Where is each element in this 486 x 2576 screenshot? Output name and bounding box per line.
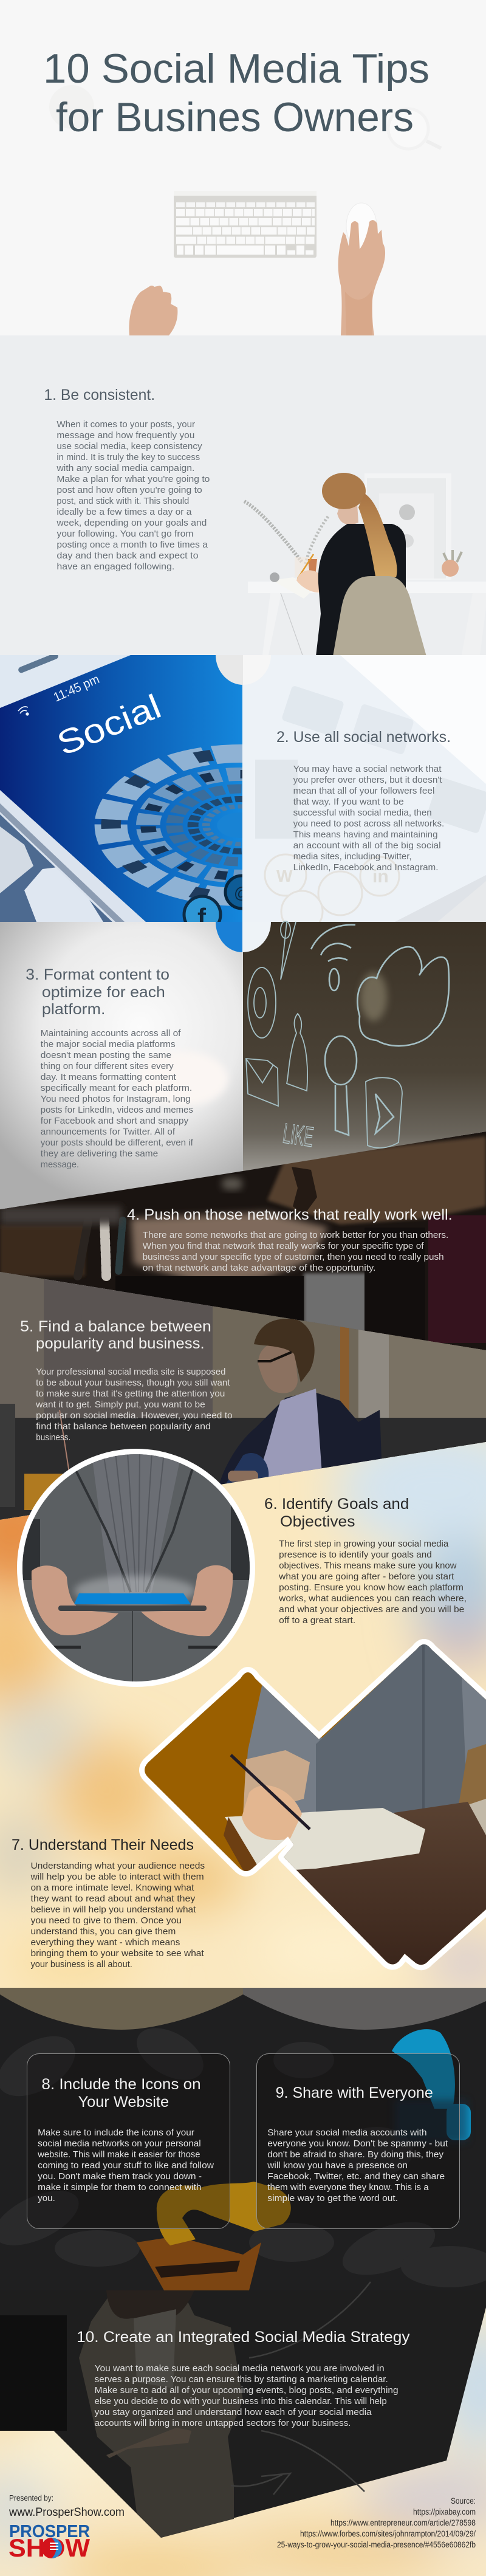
heading (264, 1496, 409, 1530)
footer: presented by: www.ProsperShow.com (9, 2506, 125, 2519)
text block (35, 1367, 233, 1443)
text block: make it simple for them to connect with (38, 2182, 202, 2193)
logo (9, 2522, 90, 2562)
heading: 7. Understand Their Needs (12, 1836, 194, 1853)
text block: specifically meant for each platform. (41, 1083, 192, 1093)
text block: bringing them to your website to see what (30, 1948, 205, 1959)
icon: wifi (311, 925, 355, 991)
panel: tip 7 text (12, 1836, 205, 1970)
text block: you need to post across all networks. (293, 819, 444, 829)
icon: speech cloud (357, 947, 449, 1046)
text block: business and your specific type of customer, then you need to really push (143, 1252, 444, 1262)
icon: pen (231, 1755, 310, 1829)
text block: accounts will bring in more untapped sectors for your business. (95, 2418, 351, 2428)
icon: faint social buttons: W (276, 867, 293, 885)
text block: Maintaining accounts across all of (41, 1028, 181, 1039)
text block: have an engaged following. (56, 562, 174, 572)
text block: day. It means formatting content (41, 1072, 177, 1082)
text block: they are delivering the same (41, 1149, 158, 1159)
text block: Make a plan for what you're going to (56, 474, 210, 484)
heading: 2. Use all social networks. (276, 729, 451, 746)
text block: to make sure that it's getting the attention you (36, 1389, 225, 1399)
text block: presence is to identify your goals and (279, 1550, 432, 1560)
icon: mouse (346, 203, 377, 249)
photo: sketched social icons (243, 921, 486, 1171)
heading: 3. Format content to (26, 966, 169, 983)
text block: use social media, keep consistency (56, 441, 202, 452)
text block: posting. Ensure you know how each platform (279, 1582, 464, 1593)
title: 10 Social Media Tips (43, 46, 430, 92)
panel: tip 8 (27, 2054, 230, 2229)
label: Like: LIKE (281, 1117, 315, 1153)
text block: you. Don't make them track you down - (38, 2171, 202, 2182)
heading (26, 966, 169, 1018)
photo: phone showing Social (0, 655, 242, 922)
icon: facebook button (182, 895, 222, 922)
text block: understand this, you can give them (30, 1926, 176, 1937)
text block: posting once a month to five times a (56, 540, 208, 550)
clasped hands (131, 1212, 328, 1285)
text block: LinkedIn, Facebook and Instagram. (293, 862, 439, 873)
heading: 10. Create an Integrated Social Media Strategy (77, 2329, 410, 2346)
dark photo base behind tip 4 (0, 1124, 486, 1355)
heading (20, 1318, 211, 1352)
icon: bell (287, 1014, 307, 1091)
text block: to be about your business, though you still want (36, 1378, 230, 1388)
heading (41, 2076, 201, 2111)
panel: watercolor background for tips 6 and 7 (0, 1422, 486, 1993)
forearm (267, 1136, 486, 1224)
text block: find that balance between popularity and (36, 1421, 211, 1432)
text block: what you are going after - before you start (278, 1571, 454, 1582)
icon: pin (281, 921, 296, 980)
text block: doesn't mean posting the same (41, 1050, 171, 1060)
heading: popularity and business. (36, 1335, 205, 1352)
text block: popular on social media. However, you need to (36, 1410, 233, 1421)
icon: at button: @ (234, 884, 250, 902)
decorative arrows (231, 2282, 371, 2495)
panel: tip 10 (0, 2282, 486, 2538)
text block: them with everyone they know. This is a (267, 2182, 429, 2193)
icon: magnifier (325, 1036, 357, 1135)
text block: you prefer over others, but it doesn't (293, 775, 442, 785)
panel: tip 9 (256, 2054, 459, 2229)
heading: 4. Push on those networks that really work well. (127, 1206, 453, 1223)
footer: sources (277, 2496, 476, 2549)
text block: This means having and maintaining (293, 829, 437, 840)
text block: You may have a social network that (293, 764, 442, 774)
text block: post and how often you're going to (56, 485, 202, 495)
text block: off to a great start. (279, 1615, 355, 1626)
text block: will know you have a presence on (267, 2160, 408, 2171)
icon: right hand (338, 220, 385, 335)
text block: you. (38, 2193, 55, 2203)
text block: mean that all of your followers feel (293, 786, 434, 796)
heading: 8. Include the Icons on (41, 2076, 201, 2093)
text block: You need photos for Instagram, long (41, 1094, 191, 1104)
text block (267, 2128, 448, 2203)
text block (143, 1230, 448, 1273)
text block: objectives. This means make sure you know (279, 1561, 457, 1571)
heading: 6. Identify Goals and (264, 1496, 409, 1513)
text block: your posts should be different, even if (41, 1138, 194, 1148)
left arm (0, 1224, 85, 1276)
text block (41, 1028, 194, 1170)
text block: announcements for Twitter. All of (41, 1127, 176, 1137)
text block: and what your objectives are and you will be (279, 1604, 464, 1615)
text block: The first step in growing your social media (279, 1539, 449, 1549)
heading: 1. Be consistent. (44, 386, 155, 404)
panel: footer watercolor (0, 2290, 486, 2576)
text block: in mind. It is truly the key to success (56, 452, 200, 462)
text block: serves a purpose. You can ensure this by starting a marketing calendar. (95, 2374, 388, 2385)
logo: PROSPER (9, 2522, 90, 2541)
icon: bracelets (78, 1220, 123, 1276)
text block: the major social media platforms (41, 1039, 176, 1049)
text block: they want to read about and what they (30, 1894, 196, 1904)
icon: coffee cup (388, 109, 441, 149)
text block: ideally be a few times a day or a (56, 507, 192, 517)
text block: message. (41, 1159, 79, 1170)
heading: Objectives (280, 1513, 355, 1530)
heading: optimize for each (42, 984, 165, 1001)
image: businessman holding tablet (17, 1449, 255, 1692)
text block: business. (36, 1432, 70, 1443)
text block: When it comes to your posts, your (56, 419, 195, 430)
heading: Your Website (78, 2093, 169, 2111)
panel: tip 4 text (127, 1206, 453, 1273)
text block (30, 1861, 205, 1970)
panel: tip 3 (0, 922, 243, 1209)
icon: keyboard (174, 191, 317, 258)
title: for Busines Owners (56, 94, 414, 140)
text block: coming to read your stuff to like and follow (38, 2160, 214, 2171)
panel: tip 5 (0, 1270, 486, 1527)
panel: tips 8 and 9 background (0, 1988, 486, 2290)
text block: There are some networks that are going to work better for you than others. (143, 1230, 448, 1240)
icon: left hand (129, 286, 177, 335)
photo: woman with laptop (0, 2290, 243, 2538)
heading: 9. Share with Everyone (276, 2084, 433, 2101)
icon: wifi (18, 707, 29, 715)
image: person writing in notebook in mountain frame (140, 1635, 486, 1975)
text block: will help you be able to interact with them (30, 1872, 204, 1882)
panel: tip 3 center tails (216, 655, 271, 952)
panel: tip 1 (0, 335, 486, 656)
text block: When you find that network that really works for your specific type of (143, 1241, 424, 1251)
icon: facebook button: f (197, 903, 207, 932)
icon: play tile (366, 1077, 402, 1148)
heading: platform. (42, 1001, 106, 1018)
text block: website. This will make it easier for those (37, 2149, 200, 2160)
text block: you stay organized and understand how each of your social media (95, 2407, 372, 2417)
text block: don't be afraid to share. By doing this, they (267, 2149, 444, 2160)
text block (95, 2363, 399, 2428)
text block (278, 1539, 467, 1626)
decorative gold question mark (157, 2182, 291, 2245)
text block: post, and stick with it. This should (56, 496, 189, 506)
time label: 11:45 pm (52, 672, 101, 705)
text block: for Facebook and short and snappy (41, 1116, 189, 1126)
illustration: woman at desk (244, 473, 486, 656)
text block: on a more intimate level. Knowing what (30, 1883, 194, 1893)
icon: faint plate (49, 85, 94, 129)
text block: everyone you know. Don't be spammy - but (267, 2138, 448, 2149)
text block: believe in will help you understand what (30, 1905, 196, 1915)
panel: hero (0, 0, 486, 335)
logo: SHOW (9, 2533, 90, 2562)
text block: successful with social media, then (293, 808, 432, 818)
panel: tip 6 text (264, 1496, 467, 1626)
orange 3D letters (137, 2236, 261, 2290)
text block: with any social media campaign. (56, 463, 194, 473)
text block: message and how frequently you (56, 430, 194, 441)
text block (293, 764, 444, 873)
text block: Make sure to add all of your upcoming events, blog posts, and everything (95, 2385, 399, 2396)
icon: at button (224, 874, 242, 910)
text block: want it to get. Simply put, you want to be (35, 1400, 205, 1410)
text block: posts for LinkedIn, videos and memes (41, 1105, 193, 1115)
table (24, 1474, 68, 1510)
text block: Make sure to include the icons of your (38, 2128, 194, 2138)
text block: Facebook, Twitter, etc. and they can share (267, 2171, 445, 2182)
icon: faint social buttons: in (372, 867, 389, 887)
title (43, 46, 430, 140)
chart-like photo wheel (95, 744, 242, 906)
text block: media sites, including Twitter, (293, 851, 412, 862)
text block: else you decide to do with your business into this calendar. This will help (95, 2396, 387, 2406)
text block: that way. If you want to be (293, 797, 404, 807)
text block: your business is all about. (30, 1959, 132, 1970)
icon: mail (246, 1059, 278, 1106)
text block: on that network and take advantage of the opportunity. (143, 1263, 375, 1273)
text block (56, 419, 210, 572)
man at laptop (219, 1319, 382, 1495)
label: Social: Social (52, 687, 166, 763)
text block (37, 2128, 214, 2203)
footer: sources: https://pixabay.com (413, 2507, 476, 2516)
text block: simple way to get the word out. (267, 2193, 398, 2203)
blurred object (222, 1178, 242, 1190)
icon: at sign (248, 967, 276, 1038)
text block: an account with all of the big social (293, 840, 441, 851)
text block: week, depending on your goals and (56, 518, 207, 528)
text block: You want to make sure each social media network you are involved in (95, 2363, 385, 2374)
text block: thing on four different sites every (41, 1061, 174, 1071)
text block: your following. You can't go from (56, 529, 193, 539)
text block: Your professional social media site is supposed (36, 1367, 225, 1377)
text block: everything they want - which means (30, 1937, 180, 1948)
icon: wristwatch (292, 1167, 317, 1215)
text block: works, what audiences you can reach where, (278, 1593, 467, 1604)
text block: Understanding what your audience needs (30, 1861, 205, 1871)
icon: faint social buttons (264, 853, 400, 922)
text block: social media networks on your personal (38, 2138, 201, 2149)
decorative blue question mark (392, 2029, 455, 2109)
footer: presented by: Presented by: (9, 2493, 53, 2502)
footer: presented by (9, 2493, 125, 2562)
text block: day and then back and expect to (56, 551, 199, 561)
panel: tip 2 (242, 655, 486, 932)
text block: you need to give to them. Once you (30, 1915, 182, 1926)
heading: 5. Find a balance between (20, 1318, 211, 1335)
text block: Share your social media accounts with (267, 2128, 426, 2138)
translucent arcs (0, 1988, 486, 2030)
footer: sources: Source: (451, 2496, 476, 2506)
